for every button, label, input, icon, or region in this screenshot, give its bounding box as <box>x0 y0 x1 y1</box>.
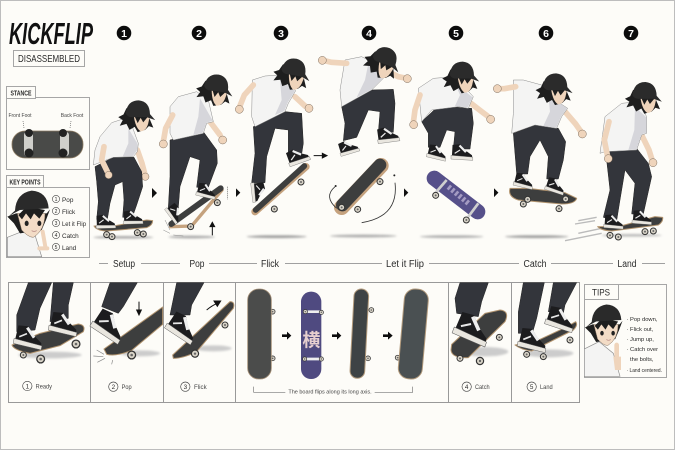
panel: tips: · Flick out, <box>626 327 654 333</box>
panel: key points: 2 <box>55 209 58 215</box>
phase timeline: Setup <box>113 259 135 270</box>
panel: stance: STANCE <box>10 90 32 98</box>
panel: key points <box>6 176 90 258</box>
phase timeline <box>99 259 665 270</box>
detail: catch: 4 <box>465 384 469 391</box>
panel: key points: 4 <box>55 233 58 239</box>
detail: flick: Flick <box>194 384 207 391</box>
skater 2: pop <box>159 72 235 238</box>
panel: key points: Flick <box>62 209 76 216</box>
panel: stance: Front Foot <box>8 113 32 119</box>
panel: tips: · Land centered. <box>626 368 662 374</box>
flip arrows <box>282 332 393 340</box>
detail: pop <box>89 283 163 391</box>
panel: tips: · Jump up, <box>626 337 654 343</box>
skater 4: let it flip <box>318 41 411 237</box>
phase timeline: Catch <box>524 259 546 270</box>
panel: stance <box>6 86 90 170</box>
skater 3: flick <box>235 55 327 238</box>
step numbers: 1 <box>121 28 127 40</box>
skater 6: catch <box>493 73 586 238</box>
panel: key points: Catch <box>62 233 79 240</box>
panel: key points: 3 <box>55 221 58 227</box>
step numbers: 2 <box>196 28 202 40</box>
step numbers: 3 <box>278 28 284 40</box>
detail: ready: 1 <box>26 383 30 390</box>
detail: land <box>515 283 578 391</box>
detail: pop: Pop <box>122 384 132 391</box>
detail: pop: 2 <box>112 384 116 391</box>
detail: catch <box>451 283 508 391</box>
detail: land: Land <box>540 384 553 391</box>
board: purple underside: 横 <box>302 331 320 351</box>
panel: detail strip frame <box>8 282 580 402</box>
subtitle box: DISASSEMBLED <box>18 54 80 65</box>
panel: key points: Pop <box>62 197 74 204</box>
subtitle box <box>14 50 84 66</box>
panel: key points: Land <box>62 245 77 252</box>
step numbers <box>117 26 638 40</box>
caption with bracket: The board flips along its long axis. <box>288 390 372 396</box>
phase timeline: Let it Flip <box>386 259 424 270</box>
panel: tips <box>584 284 666 378</box>
panel: key points: KEY POINTS <box>10 180 41 186</box>
step numbers: 5 <box>453 28 459 40</box>
board: grip side <box>248 289 275 379</box>
detail: catch: Catch <box>475 384 490 391</box>
skater 7: land <box>565 82 663 241</box>
step numbers: 7 <box>628 28 634 40</box>
board: purple underside <box>301 292 323 379</box>
panel: key points: 1 <box>55 197 58 203</box>
panel: key points: Let it Flip <box>62 221 86 228</box>
title: KICKFLIP <box>9 16 93 51</box>
detail: board flip sequence <box>248 288 429 396</box>
detail: flick <box>164 283 234 391</box>
panel: stance: Back Foot <box>61 113 84 119</box>
panel: tips: · Catch over <box>626 347 658 353</box>
board: landing side <box>395 288 429 380</box>
detail: flick: 3 <box>184 384 188 391</box>
phase timeline: Flick <box>261 259 280 270</box>
panel: tips: TIPS <box>592 288 610 298</box>
board: edge-on rotation <box>350 289 374 379</box>
detail: ready: Ready <box>36 384 53 391</box>
step numbers: 4 <box>366 28 372 40</box>
skater 1: setup <box>93 100 155 240</box>
detail: ready <box>12 283 84 391</box>
phase timeline: Pop <box>190 259 205 270</box>
caption with bracket <box>254 387 413 396</box>
skater 5: let it flip <box>410 62 498 238</box>
step numbers: 6 <box>543 28 549 40</box>
detail: land: 5 <box>530 384 534 391</box>
arrow <box>152 188 157 198</box>
phase timeline: Land <box>618 259 636 270</box>
panel: tips: the bolts, <box>630 357 654 363</box>
panel: key points: 5 <box>55 245 58 251</box>
panel: tips: · Pop down, <box>626 317 658 323</box>
